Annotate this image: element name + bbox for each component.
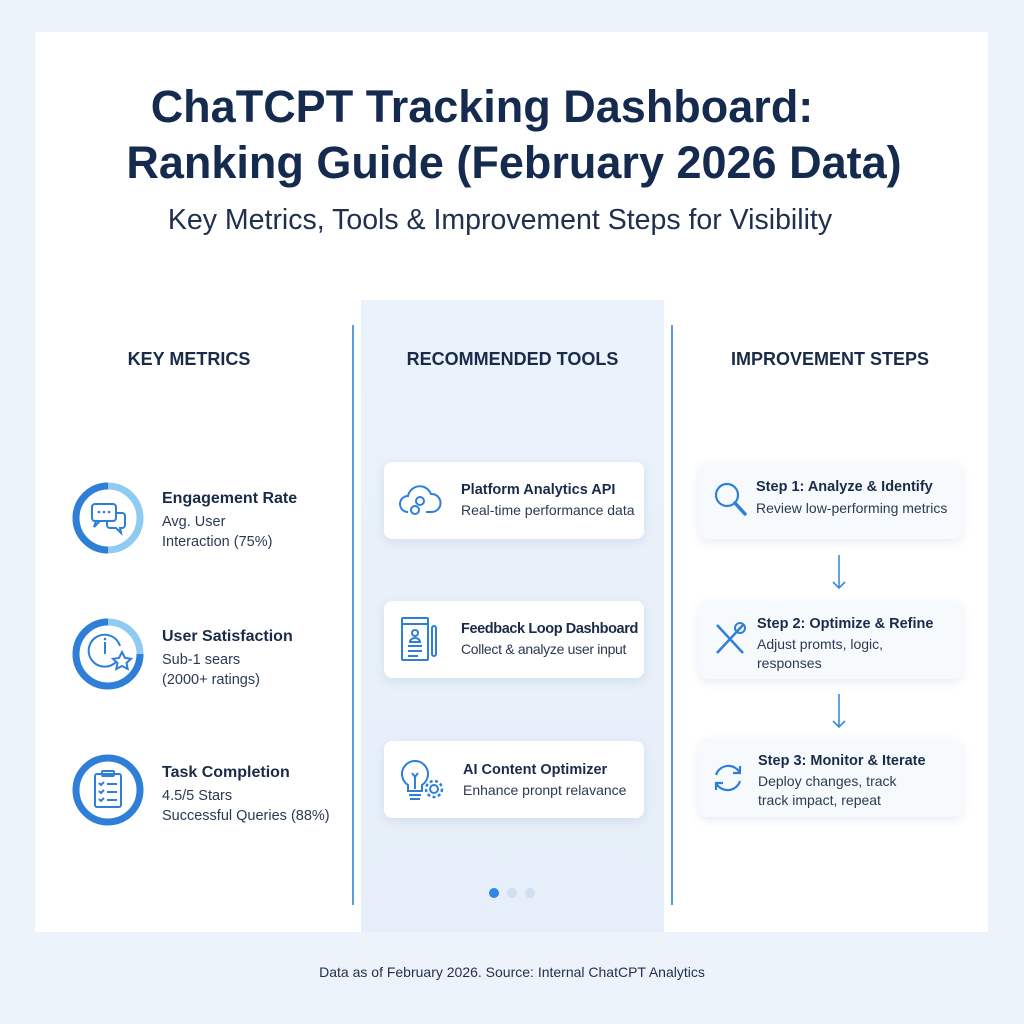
metric: engagement rate: Interaction (75%)	[162, 534, 272, 550]
icon: chat ring	[72, 482, 144, 554]
title: ChaTCPT Tracking Dashboard:	[151, 81, 813, 132]
tool: feedback loop dashboard: Collect & analyze user input	[461, 641, 626, 657]
metric: task completion: 4.5/5 Stars	[162, 788, 232, 804]
icon: refresh	[714, 764, 742, 792]
step 2	[699, 601, 962, 679]
metric: user satisfaction: User Satisfaction	[162, 628, 293, 645]
footer source: Data as of February 2026. Source: Internal ChatCPT Analytics	[319, 964, 705, 980]
metric: engagement rate: Avg. User	[162, 514, 225, 530]
step 3	[699, 739, 962, 817]
tool: ai content optimizer	[384, 741, 644, 818]
title	[126, 81, 902, 188]
metric: engagement rate	[72, 482, 297, 554]
tool: platform analytics api	[384, 462, 644, 539]
tool: ai content optimizer: Enhance pronpt relavance	[463, 782, 626, 798]
metric: user satisfaction	[72, 618, 293, 690]
icon: clock star ring	[72, 618, 144, 690]
step 2: Step 2: Optimize & Refine	[757, 616, 933, 632]
tool: platform analytics api: Platform Analytics API	[461, 482, 615, 498]
divider left	[352, 325, 354, 905]
divider right	[671, 325, 673, 905]
step 2: Adjust promts, logic,	[757, 636, 883, 652]
step 1: Step 1: Analyze & Identify	[756, 479, 933, 495]
icon: magnifier	[714, 482, 747, 516]
step 1	[699, 463, 962, 539]
arrow 2	[832, 694, 846, 728]
tool: ai content optimizer: AI Content Optimizer	[463, 762, 607, 778]
metric: task completion: Successful Queries (88%)	[162, 808, 330, 824]
icon: clipboard ring	[72, 754, 144, 826]
icon: cloud	[399, 485, 442, 515]
tool: feedback loop dashboard: Feedback Loop Dashboard	[461, 621, 638, 637]
arrow 1	[832, 555, 846, 589]
step 1: Review low-performing metrics	[756, 500, 947, 516]
step 3: Deploy changes, track	[758, 773, 897, 789]
step 3: track impact, repeat	[758, 792, 881, 808]
metric: user satisfaction: Sub-1 sears	[162, 652, 240, 668]
icon: tools	[716, 622, 746, 654]
subtitle: Key Metrics, Tools & Improvement Steps for Visibility	[168, 204, 832, 236]
icon: dashboard doc	[401, 617, 437, 661]
heading: improvement steps: IMPROVEMENT STEPS	[731, 349, 929, 369]
pagination dots	[489, 888, 535, 898]
middle panel background	[361, 300, 664, 932]
title: Ranking Guide (February 2026 Data)	[126, 137, 902, 188]
tool: platform analytics api: Real-time performance data	[461, 502, 635, 518]
icon: bulb gear	[401, 760, 444, 800]
step 2: responses	[757, 655, 822, 671]
metric: task completion: Task Completion	[162, 764, 290, 781]
metric: engagement rate: Engagement Rate	[162, 490, 297, 507]
tool: feedback loop dashboard	[384, 601, 644, 678]
metric: user satisfaction: (2000+ ratings)	[162, 672, 260, 688]
metric: task completion	[72, 754, 330, 826]
heading: recommended tools: RECOMMENDED TOOLS	[407, 349, 618, 369]
step 3: Step 3: Monitor & Iterate	[758, 753, 926, 769]
heading: key metrics: KEY METRICS	[128, 349, 250, 369]
